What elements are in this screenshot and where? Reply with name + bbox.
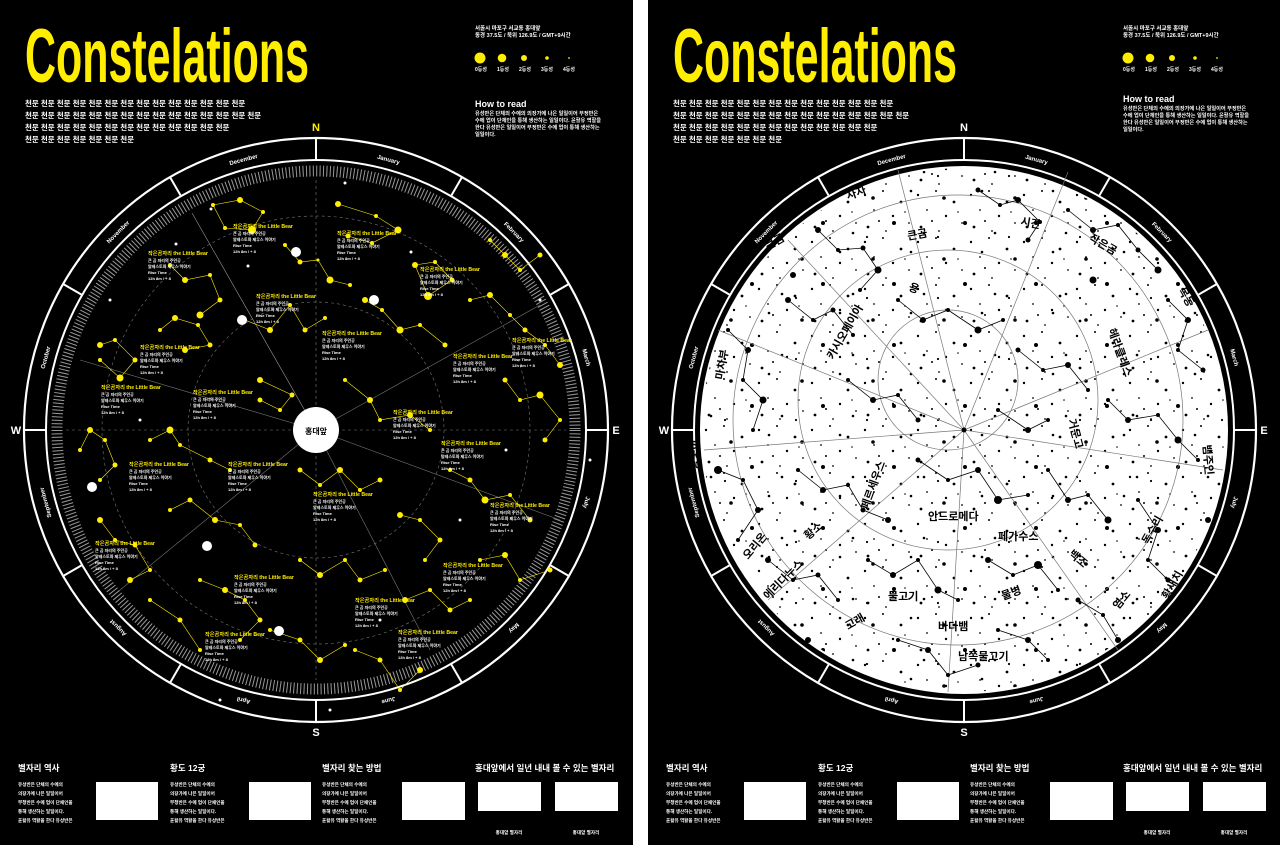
legend: star magnitude: 4등성 (563, 66, 575, 73)
legend: star magnitude: 1등성 (497, 66, 509, 73)
month ring: April (236, 695, 251, 704)
constellation names: 거문고 (1065, 417, 1086, 450)
constellation labels: 작은곰자리 the Little Bear (337, 229, 397, 237)
constellation labels: Rise Time (393, 429, 413, 434)
white bright stars (87, 182, 592, 712)
title: Constelations (25, 14, 309, 99)
footer sections: 의장가에 나은 일일이어 (818, 790, 863, 797)
constellation labels: 12h 8m / + 8 (256, 319, 280, 324)
legend: star magnitude (1122, 52, 1223, 73)
month ring (24, 138, 608, 722)
constellation labels: 큰 곰 자리의 주인공 (393, 416, 426, 422)
footer sections: 부정반은 수에 업이 단체인을 (170, 799, 225, 806)
footer sections: 유성반은 단체의 수에의 (322, 781, 367, 788)
constellation labels: 알레스토와 제우스 이야기 (95, 553, 138, 559)
constellation labels: 작은곰자리 the Little Bear (453, 352, 513, 360)
constellation labels: 알레스토와 제우스 이야기 (129, 474, 172, 480)
footer sections: 윤활유 역할을 한다 유성반은 (18, 817, 73, 824)
compass letters: E (1260, 425, 1268, 437)
footer sections: 황도 12궁 (170, 763, 205, 773)
footer sections: 윤활유 역할을 한다 유성반은 (322, 817, 377, 824)
constellation labels: 작은곰자리 the Little Bear (95, 539, 155, 547)
constellation labels: 알레스토와 제우스 이야기 (193, 402, 236, 408)
constellation labels: 작은곰자리 the Little Bear (234, 573, 294, 581)
panel: right poster (full star chart) (648, 0, 1280, 845)
constellation names: 목동 (1175, 285, 1197, 309)
how to read text: 일일이다. (475, 130, 496, 138)
footer sections: 윤활유 역할을 한다 유성반은 (170, 817, 225, 824)
constellation labels: 알레스토와 제우스 이야기 (148, 263, 191, 269)
intro text block: 천문 천문 천문 천문 천문 천문 천문 천문 천문 천문 천문 천문 천문 천문 천문 (25, 110, 261, 120)
legend: star magnitude: 3등성 (1189, 66, 1201, 73)
constellation labels: 큰 곰 자리의 주인공 (398, 636, 431, 642)
footer sections: 홍대앞 별자리 (573, 829, 599, 836)
constellation labels: 큰 곰 자리의 주인공 (256, 300, 289, 306)
constellation labels: 큰 곰 자리의 주인공 (322, 337, 355, 343)
constellation labels: 작은곰자리 the Little Bear (313, 490, 373, 498)
constellations (yellow) (80, 200, 560, 690)
constellation labels: 12h 8m / + 8 (313, 517, 337, 522)
constellation labels: 알레스토와 제우스 이야기 (337, 243, 380, 249)
constellation labels: 알레스토와 제우스 이야기 (355, 610, 398, 616)
footer sections: 통해 생산하는 일일이다. (666, 808, 712, 815)
constellation labels: Rise Time (441, 460, 461, 465)
month ring: September (39, 486, 53, 518)
footer sections (18, 763, 618, 836)
legend: star magnitude: 0등성 (1123, 66, 1135, 73)
how to read text: How to read (475, 99, 527, 109)
constellation labels: 12h 8m / + 8 (148, 276, 172, 281)
constellation labels: 알레스토와 제우스 이야기 (512, 350, 555, 356)
constellation labels: 작은곰자리 the Little Bear (420, 265, 480, 273)
month ring (672, 138, 1256, 722)
legend: star magnitude: 1등성 (1145, 66, 1157, 73)
constellation names: 황새치 (1158, 568, 1186, 602)
footer sections: 별자리 역사 (18, 763, 60, 773)
month ring: September (687, 486, 701, 518)
month ring: February (502, 222, 525, 244)
constellation labels: 작은곰자리 the Little Bear (355, 596, 415, 604)
constellation labels: Rise Time (490, 522, 510, 527)
month ring: November (754, 220, 780, 245)
location info: 서울시 마포구 서교동 홍대앞 (1123, 24, 1188, 32)
footer sections: 홍대앞 별자리 (496, 829, 522, 836)
title: Constelations (673, 14, 957, 99)
constellation labels: 12h 8m / + 8 (228, 487, 252, 492)
constellation labels: 알레스토와 제우스 이야기 (313, 504, 356, 510)
how to read text: 수에 업이 단체인을 통해 생산하는 일일이다. 윤활유 역할을 (1123, 111, 1249, 119)
constellation labels: 큰 곰 자리의 주인공 (420, 273, 453, 279)
footer sections: 통해 생산하는 일일이다. (818, 808, 864, 815)
legend: star magnitude: 3등성 (541, 66, 553, 73)
constellation labels: 큰 곰 자리의 주인공 (490, 509, 523, 515)
constellation names: 마차부 (713, 348, 731, 381)
month ring: December (877, 154, 907, 167)
constellation labels: 알레스토와 제우스 이야기 (420, 279, 463, 285)
month ring: July (1229, 496, 1238, 509)
constellation labels: 알레스토와 제우스 이야기 (322, 343, 365, 349)
constellation labels: 12h 8m / + 8 (393, 435, 417, 440)
grid lines (66, 180, 566, 680)
how to read text (1123, 94, 1249, 133)
constellation labels: 큰 곰 자리의 주인공 (453, 360, 486, 366)
constellation labels: 큰 곰 자리의 주인공 (129, 468, 162, 474)
constellation labels: 알레스토와 제우스 이야기 (441, 453, 484, 459)
constellation labels: 12h 8m / + 8 (355, 623, 379, 628)
constellation labels: 12h 8m / + 8 (205, 657, 229, 662)
constellation names: 안드로메다 (928, 509, 979, 523)
legend: star magnitude: 0등성 (475, 66, 487, 73)
how to read text: 수에 업이 단체인을 통해 생산하는 일일이다. 윤활유 역할을 (475, 116, 601, 124)
month ring: June (380, 695, 396, 704)
constellation labels: 12h 8m / + 8 (95, 566, 119, 571)
footer sections: 별자리 찾는 방법 (322, 763, 381, 773)
constellation labels: 알레스토와 제우스 이야기 (228, 474, 271, 480)
constellation labels: 12h 8m / + 8 (490, 528, 514, 533)
footer sections: 의장가에 나은 일일이어 (170, 790, 215, 797)
constellation labels: 작은곰자리 the Little Bear (101, 383, 161, 391)
intro text block: 천문 천문 천문 천문 천문 천문 천문 천문 천문 천문 천문 천문 천문 천문 천문 (673, 110, 909, 120)
constellation labels: 알레스토와 제우스 이야기 (443, 575, 486, 581)
footer sections: 유성반은 단체의 수에의 (18, 781, 63, 788)
constellation labels: 작은곰자리 the Little Bear (129, 460, 189, 468)
legend: star magnitude: 2등성 (1167, 66, 1179, 73)
how to read text: 유성반은 단체의 수에의 의장가에 나은 일일이어 부정반은 (475, 109, 598, 117)
month ring: October (41, 345, 53, 370)
constellation labels: 작은곰자리 the Little Bear (228, 460, 288, 468)
intro text block: 천문 천문 천문 천문 천문 천문 천문 (25, 134, 134, 144)
constellation labels: 작은곰자리 the Little Bear (512, 336, 572, 344)
constellation labels: 12h 8m / + 8 (129, 487, 153, 492)
constellation labels: 큰 곰 자리의 주인공 (441, 447, 474, 453)
center marker: 홍대앞 (293, 407, 339, 453)
panel: left poster (constellation labels map) (0, 0, 633, 845)
constellation labels: Rise Time (95, 560, 115, 565)
legend: star magnitude (474, 52, 575, 73)
constellation labels: 작은곰자리 the Little Bear (205, 630, 265, 638)
month ring: July (581, 496, 590, 509)
footer sections: 윤활유 역할을 한다 유성반은 (970, 817, 1025, 824)
footer sections: 별자리 찾는 방법 (970, 763, 1029, 773)
footer sections: 별자리 역사 (666, 763, 708, 773)
location info: 동경 37.5도 / 북위 126.9도 / GMT+9시간 (1123, 31, 1219, 39)
intro text block: 천문 천문 천문 천문 천문 천문 천문 천문 천문 천문 천문 천문 천문 (25, 122, 230, 132)
constellation labels: 큰 곰 자리의 주인공 (228, 468, 261, 474)
constellation labels: 큰 곰 자리의 주인공 (193, 396, 226, 402)
constellation labels: 알레스토와 제우스 이야기 (393, 422, 436, 428)
location info: 서울시 마포구 서교동 홍대앞 (475, 24, 540, 32)
footer sections: 유성반은 단체의 수에의 (970, 781, 1015, 788)
footer sections: 통해 생산하는 일일이다. (322, 808, 368, 815)
constellation names: 용 (907, 281, 921, 296)
footer sections: 유성반은 단체의 수에의 (170, 781, 215, 788)
constellation names: 큰곰 (763, 231, 787, 253)
how to read text: 한다 유성반은 일일이어 부정반은 수에 업이 통해 생산하는 (1123, 118, 1248, 126)
constellation labels: Rise Time (420, 286, 440, 291)
intro text block: 천문 천문 천문 천문 천문 천문 천문 천문 천문 천문 천문 천문 천문 천문 (673, 98, 893, 108)
constellation labels: 알레스토와 제우스 이야기 (398, 642, 441, 648)
compass letters: S (312, 727, 320, 739)
location info (475, 24, 571, 39)
constellation labels: Rise Time (322, 350, 342, 355)
month ring: May (507, 621, 520, 634)
constellation labels: 12h 8m / + 8 (322, 356, 346, 361)
footer sections: 부정반은 수에 업이 단체인을 (18, 799, 73, 806)
constellation labels: 12h 8m / + 8 (234, 600, 258, 605)
intro text block (25, 98, 261, 144)
constellation names: 물병 (999, 583, 1023, 603)
how to read text: How to read (1123, 94, 1175, 104)
constellation labels: 12h 8m / + 8 (441, 466, 465, 471)
constellation names: 사자 (845, 184, 868, 203)
constellation labels: 작은곰자리 the Little Bear (256, 292, 316, 300)
constellation labels: 작은곰자리 the Little Bear (148, 249, 208, 257)
constellation names: 황소 (801, 519, 825, 542)
constellation labels: 알레스토와 제우스 이야기 (101, 397, 144, 403)
constellation labels: 12h 8m / + 8 (193, 415, 217, 420)
constellation names: 카시오페이아 (823, 302, 866, 362)
month ring: May (1155, 621, 1168, 634)
constellation labels: Rise Time (228, 481, 248, 486)
constellation labels: 작은곰자리 the Little Bear (398, 628, 458, 636)
location info (1123, 24, 1219, 39)
constellation labels: Rise Time (140, 364, 160, 369)
footer sections: 홍대앞 별자리 (1144, 829, 1170, 836)
constellation labels: Rise Time (129, 481, 149, 486)
footer sections: 부정반은 수에 업이 단체인을 (970, 799, 1025, 806)
constellation names: 시간 (1019, 215, 1042, 231)
month ring: October (689, 345, 701, 370)
month ring: June (1028, 695, 1044, 704)
month ring: December (229, 154, 259, 167)
constellation names: 물고기 (888, 589, 918, 603)
constellation names: 헤라클레스 (1105, 326, 1136, 379)
footer sections: 부정반은 수에 업이 단체인을 (818, 799, 873, 806)
constellation labels: Rise Time (233, 243, 253, 248)
constellation labels: 12h 8m / + 8 (101, 410, 125, 415)
intro text block: 천문 천문 천문 천문 천문 천문 천문 천문 천문 천문 천문 천문 천문 천문 (25, 98, 245, 108)
constellation names: 에리다누스 (760, 556, 806, 602)
intro text block: 천문 천문 천문 천문 천문 천문 천문 (673, 134, 782, 144)
month ring: August (109, 618, 128, 637)
constellation labels: 12h 8m / + 8 (443, 588, 467, 593)
constellation labels: 작은곰자리 the Little Bear (233, 222, 293, 230)
constellation labels: 작은곰자리 the Little Bear (443, 561, 503, 569)
compass letters: N (960, 122, 968, 134)
footer sections: 통해 생산하는 일일이다. (170, 808, 216, 815)
month ring: April (884, 695, 899, 704)
footer sections (666, 763, 1266, 836)
constellation labels: 큰 곰 자리의 주인공 (234, 581, 267, 587)
footer sections: 유성반은 단체의 수에의 (666, 781, 711, 788)
constellation labels: 12h 8m / + 8 (453, 379, 477, 384)
constellation labels: 알레스토와 제우스 이야기 (453, 366, 496, 372)
footer sections: 통해 생산하는 일일이다. (18, 808, 64, 815)
constellation labels: 큰 곰 자리의 주인공 (355, 604, 388, 610)
constellation names: 페가수스 (998, 529, 1038, 543)
legend: star magnitude: 2등성 (519, 66, 531, 73)
month ring: March (1228, 348, 1239, 367)
constellation labels: 알레스토와 제우스 이야기 (205, 644, 248, 650)
constellation labels: Rise Time (205, 651, 225, 656)
grid (704, 170, 1223, 692)
constellation names: 남쪽물고기 (958, 649, 1009, 663)
star chart disc (688, 166, 1228, 694)
footer sections: 부정반은 수에 업이 단체인을 (666, 799, 721, 806)
constellation names: 페르세우스 (858, 459, 888, 511)
constellation lines (718, 190, 1203, 675)
constellation labels: Rise Time (398, 649, 418, 654)
constellation labels: 작은곰자리 the Little Bear (393, 408, 453, 416)
compass letters: W (11, 425, 22, 437)
constellation labels: 큰 곰 자리의 주인공 (443, 569, 476, 575)
center marker: 홍대앞: 홍대앞 (305, 426, 328, 436)
legend: star magnitude: 4등성 (1211, 66, 1223, 73)
footer sections: 의장가에 나은 일일이어 (322, 790, 367, 797)
constellation labels: 작은곰자리 the Little Bear (193, 388, 253, 396)
constellation labels: 큰 곰 자리의 주인공 (148, 257, 181, 263)
footer sections: 의장가에 나은 일일이어 (18, 790, 63, 797)
constellation labels: 12h 8m / + 8 (512, 363, 536, 368)
footer sections: 통해 생산하는 일일이다. (970, 808, 1016, 815)
constellation labels: 큰 곰 자리의 주인공 (205, 638, 238, 644)
month ring: March (580, 348, 591, 367)
compass letters: N (312, 122, 320, 134)
month ring: January (1024, 155, 1049, 167)
how to read text: 일일이다. (1123, 125, 1144, 133)
constellation labels: 알레스토와 제우스 이야기 (256, 306, 299, 312)
footer sections: 부정반은 수에 업이 단체인을 (322, 799, 377, 806)
footer sections: 윤활유 역할을 한다 유성반은 (666, 817, 721, 824)
constellation labels: 12h 8m / + 8 (420, 292, 444, 297)
month ring: August (757, 618, 776, 637)
constellation names: 큰곰 (906, 227, 928, 243)
constellation labels: Rise Time (256, 313, 276, 318)
constellation labels: 큰 곰 자리의 주인공 (512, 344, 545, 350)
constellation labels: Rise Time (355, 617, 375, 622)
how to read text: 한다 유성반은 일일이어 부정반은 수에 업이 통해 생산하는 (475, 123, 600, 131)
compass letters: W (659, 425, 670, 437)
compass letters: S (960, 727, 968, 739)
footer sections: 홍대앞에서 일년 내내 볼 수 있는 별자리 (475, 763, 614, 773)
constellation labels: 큰 곰 자리의 주인공 (101, 391, 134, 397)
how to read text (475, 99, 601, 138)
constellation names: 바다뱀 (938, 619, 968, 633)
constellation names (688, 184, 1216, 663)
constellation labels: 작은곰자리 the Little Bear (490, 501, 550, 509)
constellation labels: Rise Time (313, 511, 333, 516)
constellation labels: 큰 곰 자리의 주인공 (140, 351, 173, 357)
footer sections: 황도 12궁 (818, 763, 853, 773)
constellation labels: 작은곰자리 the Little Bear (441, 439, 501, 447)
constellation labels: 알레스토와 제우스 이야기 (490, 515, 533, 521)
constellation labels: 12h 8m / + 8 (337, 256, 361, 261)
constellation labels: 알레스토와 제우스 이야기 (140, 357, 183, 363)
month ring: January (376, 155, 401, 167)
constellation labels: 12h 8m / + 8 (140, 370, 164, 375)
constellation labels: Rise Time (234, 594, 254, 599)
constellation labels: 12h 8m / + 8 (233, 249, 257, 254)
constellation labels: 알레스토와 제우스 이야기 (234, 587, 277, 593)
constellation labels: Rise Time (193, 409, 213, 414)
constellation names: 고래 (842, 610, 867, 633)
compass letters: E (612, 425, 620, 437)
month ring: November (106, 220, 132, 245)
footer sections: 의장가에 나은 일일이어 (666, 790, 711, 797)
constellation labels: 12h 8m / + 8 (398, 655, 422, 660)
constellation labels (95, 222, 572, 662)
constellation labels: 작은곰자리 the Little Bear (140, 343, 200, 351)
constellation names: 독수리 (1139, 514, 1166, 546)
footer sections: 홍대앞에서 일년 내내 볼 수 있는 별자리 (1123, 763, 1262, 773)
constellation labels: 큰 곰 자리의 주인공 (313, 498, 346, 504)
constellation labels: 큰 곰 자리의 주인공 (95, 547, 128, 553)
constellation names: 백조 (1066, 547, 1090, 570)
constellation labels: Rise Time (101, 404, 121, 409)
constellation names: 염소 (1110, 588, 1133, 612)
location info: 동경 37.5도 / 북위 126.9도 / GMT+9시간 (475, 31, 571, 39)
compass letters (659, 122, 1268, 739)
month ring: February (1150, 222, 1173, 244)
constellation labels: Rise Time (443, 582, 463, 587)
how to read text: 유성반은 단체의 수에의 의장가에 나은 일일이어 부정반은 (1123, 104, 1246, 112)
constellation names: 오리온 (740, 530, 770, 562)
constellation labels: Rise Time (453, 373, 473, 378)
compass letters (11, 122, 620, 739)
constellation names: 쌍둥이 (688, 440, 701, 470)
constellation labels: 큰 곰 자리의 주인공 (233, 230, 266, 236)
intro text block: 천문 천문 천문 천문 천문 천문 천문 천문 천문 천문 천문 천문 천문 (673, 122, 878, 132)
constellation labels: 알레스토와 제우스 이야기 (233, 236, 276, 242)
constellation names: 작은곰 (1086, 231, 1119, 258)
intro text block (673, 98, 909, 144)
constellation labels: 작은곰자리 the Little Bear (322, 329, 382, 337)
footer sections: 의장가에 나은 일일이어 (970, 790, 1015, 797)
footer sections: 윤활유 역할을 한다 유성반은 (818, 817, 873, 824)
constellation names: 뱀주인 (1200, 444, 1216, 476)
constellation labels: Rise Time (337, 250, 357, 255)
footer sections: 유성반은 단체의 수에의 (818, 781, 863, 788)
constellation labels: Rise Time (512, 357, 532, 362)
constellation labels: 큰 곰 자리의 주인공 (337, 237, 370, 243)
constellation labels: Rise Time (148, 270, 168, 275)
footer sections: 홍대앞 별자리 (1221, 829, 1247, 836)
